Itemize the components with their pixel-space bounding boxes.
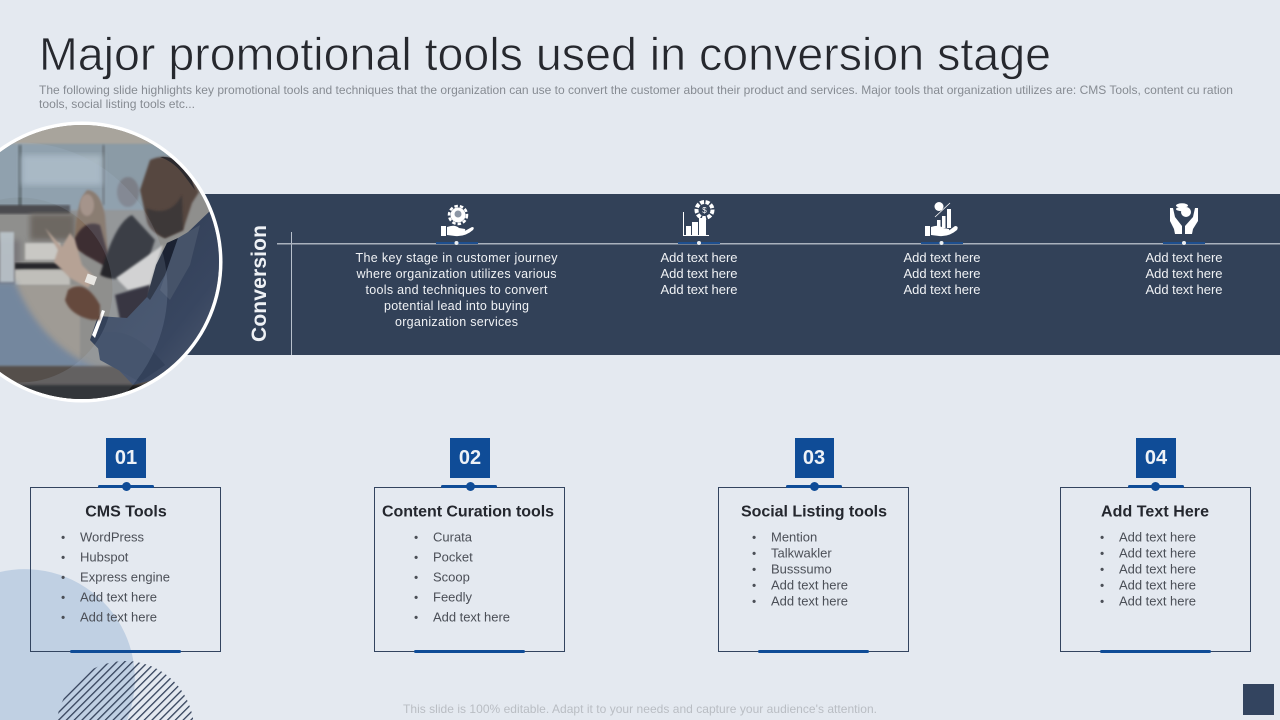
page number block: [1243, 684, 1274, 715]
text: column 4: Add text here: [1146, 250, 1222, 265]
card 03: Social Listing tools: Busssumo: [771, 562, 832, 576]
card 04: Add Text Here: Add text here: [1119, 546, 1196, 560]
icon 3: hand with growth chart: [921, 202, 963, 245]
card 03: Social Listing tools: •: [752, 562, 756, 576]
node 1: [436, 241, 478, 245]
text: column 3: Add text here: [904, 266, 980, 281]
icon 2: chart with gear: $: [702, 206, 707, 215]
title: Major promotional tools used in conversion stage: [39, 28, 1051, 80]
card 03: Social Listing tools: •: [752, 546, 756, 560]
panel: conversion band: [150, 194, 1280, 355]
decorative hatched circle: [54, 660, 196, 720]
card 01: CMS Tools: 01: [115, 447, 137, 469]
icon 4: two hands holding coins: [1163, 203, 1205, 245]
card 04: Add Text Here: Add text here: [1119, 594, 1196, 608]
card 04: Add Text Here: •: [1100, 530, 1104, 544]
text: column 2: Add text here: [660, 282, 738, 297]
card 01: CMS Tools: Add text here: [80, 590, 157, 604]
card 04: Add Text Here: •: [1100, 594, 1104, 608]
node 4: [1163, 241, 1205, 245]
card 02: Content Curation tools: Pocket: [433, 550, 473, 564]
text: stage description: potential lead into buying: [384, 299, 529, 313]
text: column 4: Add text here: [1146, 282, 1222, 297]
footer note: This slide is 100% editable. Adapt it to your needs and capture your audience's attention.: [403, 702, 877, 716]
icon 2: chart with gear: [678, 202, 720, 245]
subtitle text: tools, social listing tools etc...: [39, 97, 195, 111]
card 03: Social Listing tools: •: [752, 530, 756, 544]
card 04: Add Text Here: [1060, 438, 1250, 653]
card 02: Content Curation tools: Feedly: [433, 590, 473, 604]
card 04: Add Text Here: Add text here: [1119, 578, 1196, 592]
text: column 2: Add text here: [660, 250, 738, 265]
card 03: Social Listing tools: •: [752, 594, 756, 608]
photo: meeting: [0, 120, 230, 410]
text: column 4: Add text here: [1146, 266, 1222, 281]
text: column 2: Add text here: [660, 266, 738, 281]
icon 1: hand with gear: [436, 206, 478, 245]
card 02: Content Curation tools: Add text here: [433, 610, 510, 624]
text: stage description: tools and techniques to convert: [366, 283, 548, 297]
subtitle text: [39, 83, 1233, 111]
card 04: Add Text Here: •: [1100, 578, 1104, 592]
text: column 3: Add text here: [904, 282, 980, 297]
card 03: Social Listing tools: [718, 438, 908, 653]
text: column 4: [1146, 250, 1222, 297]
card 02: Content Curation tools: •: [414, 570, 418, 584]
node 2: [678, 241, 720, 245]
subtitle text: The following slide highlights key promotional tools and techniques that the organization can use to convert the customer about their product and services. Major tools that organization utilizes are: CMS Tools, content cu ration: [39, 83, 1233, 97]
card 01: CMS Tools: Add text here: [80, 610, 157, 624]
card 04: Add Text Here: •: [1100, 546, 1104, 560]
card 01: CMS Tools: Express engine: [80, 570, 170, 584]
card 02: Content Curation tools: Content Curation tools: [382, 504, 554, 520]
card 03: Social Listing tools: Talkwakler: [771, 546, 832, 560]
text: stage description: The key stage in customer journey: [356, 251, 558, 265]
card 04: Add Text Here: Add Text Here: [1101, 504, 1209, 520]
card 01: CMS Tools: •: [61, 610, 65, 624]
card 02: Content Curation tools: [374, 438, 564, 653]
text: column 3: Add text here: [904, 250, 980, 265]
card 01: CMS Tools: •: [61, 550, 65, 564]
card 01: CMS Tools: WordPress: [80, 530, 145, 544]
band label: Conversion: [248, 225, 271, 342]
card 01: CMS Tools: •: [61, 590, 65, 604]
decorative pale circle: [0, 569, 135, 720]
card 02: Content Curation tools: Scoop: [433, 570, 470, 584]
card 04: Add Text Here: 04: [1145, 447, 1168, 469]
card 03: Social Listing tools: Social Listing tools: [741, 504, 887, 520]
card 01: CMS Tools: [30, 438, 220, 653]
card 03: Social Listing tools: •: [752, 578, 756, 592]
node 3: [921, 241, 963, 245]
text: stage description: organization services: [395, 315, 518, 329]
card 03: Social Listing tools: 03: [803, 447, 825, 469]
card 03: Social Listing tools: Mention: [771, 530, 817, 544]
card 02: Content Curation tools: •: [414, 530, 418, 544]
card 02: Content Curation tools: •: [414, 610, 418, 624]
text: column 3: [904, 250, 980, 297]
card 01: CMS Tools: Hubspot: [80, 550, 129, 564]
text: stage description: where organization utilizes various: [356, 267, 556, 281]
card 01: CMS Tools: •: [61, 570, 65, 584]
card 01: CMS Tools: •: [61, 530, 65, 544]
text: column 2: [660, 250, 738, 297]
card 03: Social Listing tools: Add text here: [771, 594, 848, 608]
card 04: Add Text Here: Add text here: [1119, 530, 1196, 544]
card 02: Content Curation tools: 02: [459, 447, 481, 469]
card 02: Content Curation tools: •: [414, 550, 418, 564]
card 04: Add Text Here: •: [1100, 562, 1104, 576]
card 03: Social Listing tools: Add text here: [771, 578, 848, 592]
text: stage description: [356, 251, 558, 329]
card 04: Add Text Here: Add text here: [1119, 562, 1196, 576]
card 02: Content Curation tools: Curata: [433, 530, 473, 544]
card 02: Content Curation tools: •: [414, 590, 418, 604]
card 01: CMS Tools: CMS Tools: [85, 504, 167, 520]
